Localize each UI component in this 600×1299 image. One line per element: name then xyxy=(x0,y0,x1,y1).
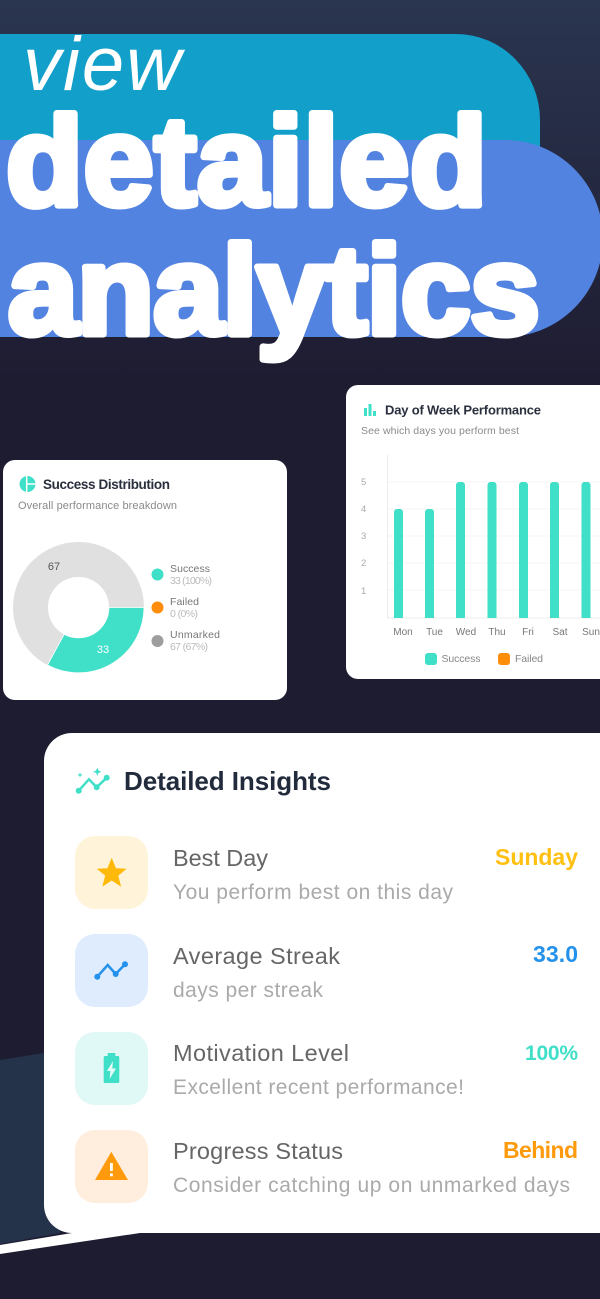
bar chart: Tue xyxy=(426,627,443,638)
row: motivation level xyxy=(75,1032,578,1105)
donut chart: 67 xyxy=(48,561,60,573)
subtitle: See which days you perform best xyxy=(361,425,519,437)
legend xyxy=(425,653,543,665)
bar chart: Fri xyxy=(522,627,534,638)
row: motivation level: Excellent recent performance! xyxy=(173,1076,464,1099)
row: best day xyxy=(75,836,578,909)
teal banner xyxy=(0,34,540,180)
blue banner xyxy=(0,140,600,337)
icon: sparkline xyxy=(76,768,110,794)
bar chart: Sat xyxy=(552,627,568,638)
legend: Unmarked xyxy=(170,629,220,641)
heading: Day of Week Performance xyxy=(385,402,541,418)
legend: 0 (0%) xyxy=(170,608,198,620)
icon: trend xyxy=(94,961,128,980)
row: progress status: Consider catching up on unmarked days xyxy=(173,1174,570,1197)
row: average streak xyxy=(75,934,578,1007)
row: average streak: Average Streak xyxy=(173,943,340,969)
bottom-left navy shape xyxy=(0,1053,140,1254)
bar chart: Thu xyxy=(488,627,506,638)
panel: day of week performance xyxy=(346,385,600,679)
icon: bars xyxy=(364,404,376,416)
row: average streak: 33.0 xyxy=(533,941,578,967)
bar chart: Wed xyxy=(456,627,476,638)
donut chart: 33 xyxy=(97,644,109,656)
row: motivation level: Motivation Level xyxy=(173,1040,349,1066)
row: best day: Sunday xyxy=(495,844,578,870)
legend: Success xyxy=(170,563,210,575)
heading: Success Distribution xyxy=(43,477,170,492)
bar chart xyxy=(361,455,600,638)
bar chart: 1 xyxy=(361,586,366,597)
row: progress status xyxy=(75,1130,578,1203)
bar chart: 4 xyxy=(361,504,366,515)
donut chart xyxy=(30,560,144,673)
bar chart: 5 xyxy=(361,477,366,488)
row: progress status: Behind xyxy=(503,1137,578,1163)
legend xyxy=(152,563,220,653)
headline: view xyxy=(23,22,185,107)
row: best day: Best Day xyxy=(173,845,268,871)
legend: Failed xyxy=(515,653,543,665)
icon: warning xyxy=(95,1152,128,1180)
icon: battery xyxy=(104,1053,119,1083)
icon: pie xyxy=(20,475,36,493)
legend: 33 (100%) xyxy=(170,575,212,587)
headline: analytics xyxy=(8,220,540,361)
bar chart: Sun xyxy=(582,627,600,638)
row: average streak: days per streak xyxy=(173,979,324,1002)
headline: detailed xyxy=(6,91,487,232)
bar chart: 3 xyxy=(361,531,366,542)
bar chart: Mon xyxy=(393,627,413,638)
headline xyxy=(6,22,540,361)
panel: detailed insights xyxy=(44,733,600,1233)
panel: success distribution xyxy=(3,460,287,700)
heading: Detailed Insights xyxy=(124,766,331,796)
legend: Success xyxy=(442,653,480,665)
legend: Failed xyxy=(170,596,199,608)
row: best day: You perform best on this day xyxy=(173,881,454,904)
row: motivation level: 100% xyxy=(525,1042,578,1065)
icon: star xyxy=(97,858,127,887)
bar chart: 2 xyxy=(361,558,366,569)
legend: 67 (67%) xyxy=(170,641,208,653)
subtitle: Overall performance breakdown xyxy=(18,500,177,512)
row: progress status: Progress Status xyxy=(173,1138,343,1164)
